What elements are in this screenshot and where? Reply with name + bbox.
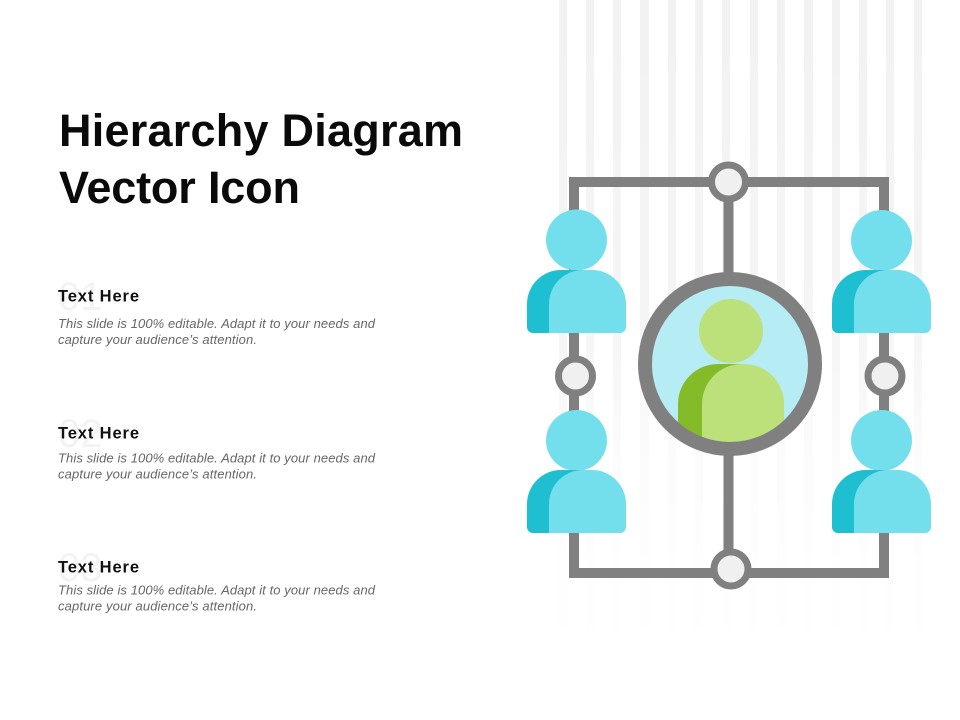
text block 1 — [58, 275, 376, 347]
text block 2 — [58, 412, 376, 482]
person bottom left — [527, 410, 626, 533]
hierarchy diagram — [527, 165, 931, 586]
connector frame — [574, 182, 884, 573]
faint number 01: 01 — [58, 275, 102, 319]
top node — [712, 165, 746, 199]
description 3: This slide is 100% editable. Adapt it to your needs and — [58, 582, 376, 598]
description 2 — [58, 450, 376, 482]
person bottom right — [832, 410, 931, 533]
description 3 — [58, 582, 376, 614]
central person in circle — [645, 279, 815, 450]
description 1: This slide is 100% editable. Adapt it to your needs and — [58, 316, 376, 331]
description 1 — [58, 316, 376, 347]
heading 3: Text Here — [58, 558, 139, 576]
right node — [868, 359, 902, 393]
heading 1: Text Here — [58, 288, 139, 306]
description 1: capture your audience’s attention. — [58, 332, 257, 347]
faint number 03: 03 — [58, 546, 102, 590]
title — [59, 105, 463, 213]
background stripes — [559, 0, 922, 650]
faint number 02: 02 — [58, 412, 102, 456]
left node — [558, 359, 592, 393]
person top left — [527, 210, 626, 333]
heading 2: Text Here — [58, 424, 139, 442]
description 2: This slide is 100% editable. Adapt it to your needs and — [58, 450, 376, 466]
title: Vector Icon — [59, 162, 300, 213]
description 2: capture your audience’s attention. — [58, 466, 257, 482]
bottom node — [714, 552, 748, 586]
title: Hierarchy Diagram — [59, 105, 463, 156]
person top right — [832, 210, 931, 333]
text block 3 — [58, 546, 376, 614]
description 3: capture your audience’s attention. — [58, 598, 257, 614]
